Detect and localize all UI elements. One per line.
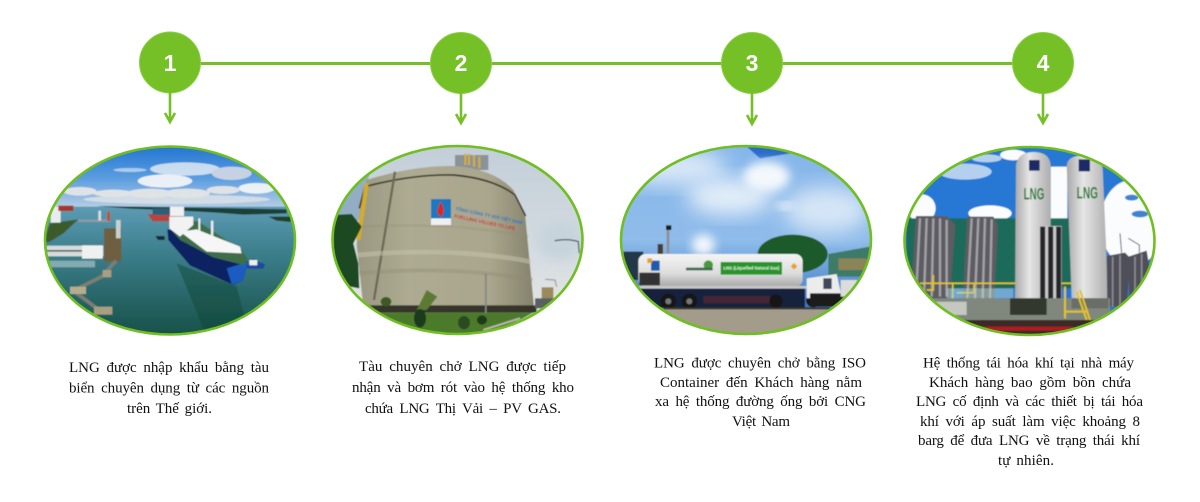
arrow: step 4 down [1038, 93, 1048, 123]
PV GAS logo [430, 198, 452, 219]
text block: step 2 description [352, 359, 574, 417]
text block: step 3 description: xa hệ thống đường ống bởi CNG [655, 394, 866, 410]
text block: step 3 description: Container đến Khách hàng nằm [660, 375, 862, 391]
distant ship [147, 214, 178, 221]
step 3 number badge: 3 [746, 50, 758, 76]
LNG ship hull [167, 229, 248, 285]
text block: step 1 description [69, 360, 270, 417]
connector line between step numbers [198, 62, 1018, 65]
tree [333, 214, 362, 288]
yellow pipes [919, 274, 1072, 299]
photo: ISO container truck: LNG (Liquefied Natural Gas) [723, 265, 780, 271]
step 2 number badge [430, 32, 492, 94]
photo: ISO container truck [613, 143, 877, 338]
ship reflection [176, 264, 244, 330]
photo: regasification station with LNG tanks [900, 143, 1163, 337]
building right [828, 247, 870, 277]
text block: step 3 description: LNG được chuyên chở bằng ISO [654, 356, 866, 372]
tanks [1015, 152, 1051, 298]
arrow: step 1 down [165, 92, 175, 122]
text block: step 2 description: chứa LNG Thị Vải – PV GAS. [365, 401, 561, 417]
text block: step 4 description: tự nhiên. [998, 453, 1054, 469]
far left shore [43, 219, 78, 243]
green building [907, 218, 1072, 288]
photo: regasification station with LNG tanks: LNG [1024, 185, 1044, 204]
text block: step 4 description: Hệ thống tái hóa khí tại nhà máy [923, 356, 1134, 372]
tug [155, 236, 165, 240]
base [910, 298, 1110, 320]
dark vaporizer centre [1045, 225, 1063, 299]
step 2 number badge: 2 [455, 50, 467, 76]
text block: step 1 description: LNG được nhập khẩu bằng tàu [69, 360, 270, 376]
right vaporizers [1107, 253, 1131, 307]
roof structure [455, 155, 488, 170]
photo: LNG storage tank Thi Vai: TỔNG CÔNG TY KHÍ VIỆT NAM [455, 204, 524, 225]
text block: step 4 description: LNG cố định và các thiết bị tái hóa [916, 394, 1143, 410]
step 4 number badge [1012, 32, 1074, 94]
lamps [555, 240, 579, 253]
arrow: step 3 down [747, 93, 757, 124]
text block: step 3 description: Việt Nam [732, 414, 790, 430]
ground [661, 307, 831, 333]
step 3 number badge [722, 32, 782, 94]
photo: regasification station with LNG tanks: LNG [1077, 184, 1098, 203]
text block: step 4 description: barg để đưa LNG về trạng thái khí [918, 433, 1140, 449]
text block: step 1 description: trên Thế giới. [127, 401, 212, 417]
text block: step 4 description: khí với áp suất làm việc khoảng 8 [920, 414, 1140, 430]
text block: step 3 description [654, 356, 866, 430]
chassis [638, 286, 807, 289]
arrow: step 2 down [456, 93, 466, 123]
jetty [47, 246, 103, 256]
photo: LNG storage tank Thi Vai: FUELLING VALUES TO LIFE [454, 213, 516, 231]
text block: step 1 description: biển chuyên dụng từ các nguồn [69, 380, 270, 396]
text block: step 2 description: Tàu chuyên chở LNG được tiếp [359, 359, 566, 375]
step 1 number badge: 1 [164, 50, 177, 76]
step 4 number badge: 4 [1037, 50, 1050, 76]
tank container [638, 254, 803, 287]
tank [357, 166, 534, 307]
photo: LNG storage tank Thi Vai [330, 143, 590, 338]
text block: step 2 description: nhận và bơm rót vào hệ thống kho [352, 380, 574, 396]
text block: step 4 description: Khách hàng bao gồm bồn chứa [929, 375, 1131, 391]
vaporizers left [911, 216, 955, 298]
text block: step 4 description [916, 356, 1143, 469]
step 1 number badge [140, 32, 200, 93]
cab [807, 274, 842, 298]
photo: LNG carrier at port [40, 143, 303, 337]
tree [758, 235, 828, 273]
base and ground [363, 305, 537, 313]
